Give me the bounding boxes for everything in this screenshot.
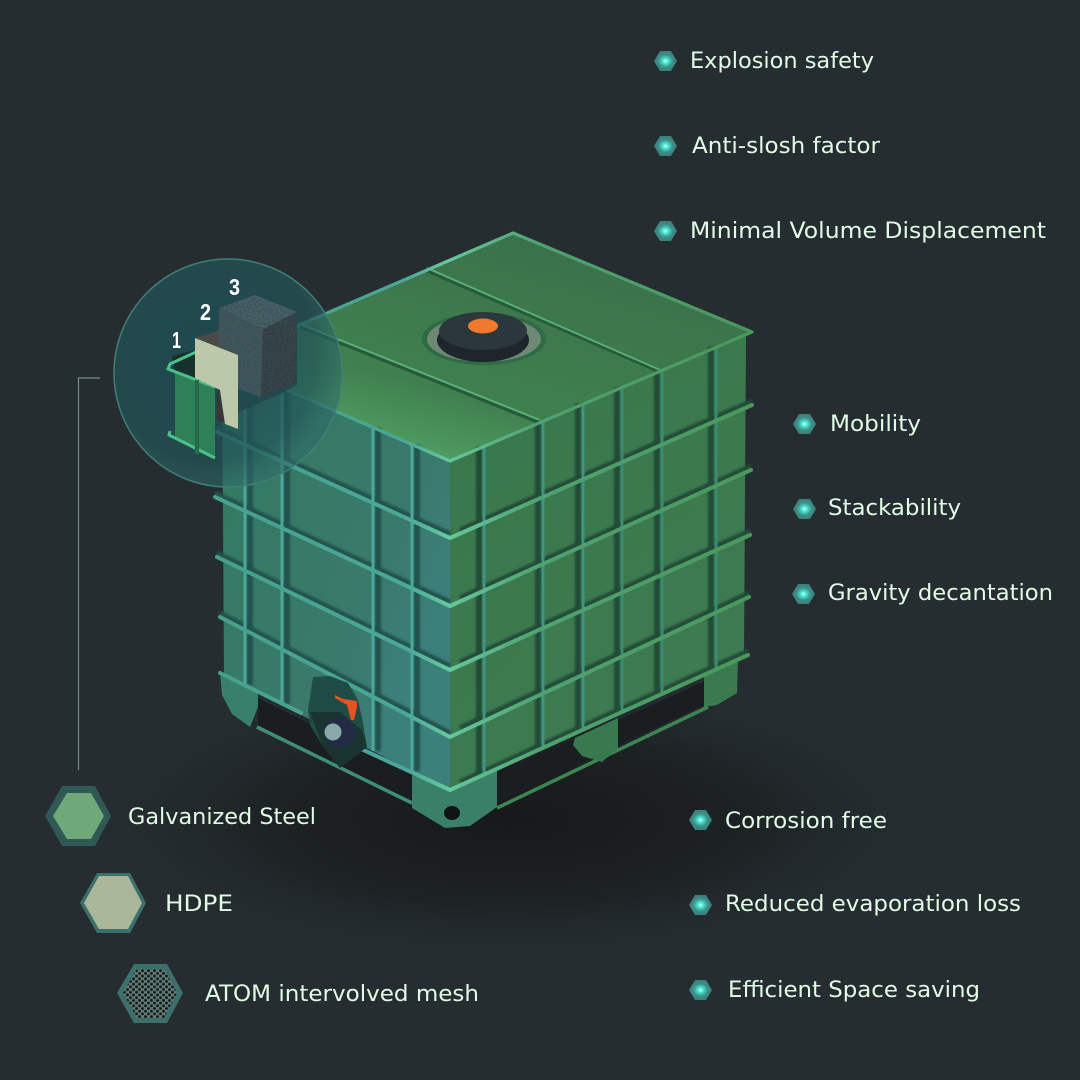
feature: Efficient Space saving: Efficient Space saving (728, 978, 980, 1003)
feature: Minimal Volume Displacement: Minimal Volume Displacement (690, 219, 1046, 244)
legend: galvanized steel (45, 786, 316, 846)
feature: Gravity decantation: Gravity decantation (828, 581, 1053, 606)
legend: ATOM mesh: ATOM intervolved mesh (205, 982, 479, 1007)
steel layer section (168, 350, 215, 458)
feature: Mobility: Mobility (830, 412, 921, 437)
layer number 1: 1 (172, 327, 181, 353)
pallet base (220, 660, 738, 828)
drain valve (308, 676, 367, 768)
layer number 3: 3 (229, 274, 240, 300)
cage rail shadows (215, 401, 752, 782)
legend: ATOM mesh (117, 964, 479, 1023)
top seams (300, 268, 660, 423)
feature: Stackability: Stackability (828, 496, 961, 521)
feature: Reduced evaporation loss: Reduced evaporation loss (725, 892, 1021, 917)
feature: Mobility (793, 412, 921, 437)
floor shadow (70, 670, 950, 970)
cage horizontal rails (215, 233, 752, 790)
feature: Explosion safety: Explosion safety (690, 49, 874, 74)
cutaway corner mask (196, 300, 297, 425)
tank left face (222, 362, 450, 790)
cage vertical bars (245, 347, 716, 775)
legend: HDPE (80, 873, 233, 933)
HDPE layer section (195, 330, 238, 429)
IBC tank (215, 233, 752, 828)
filler cap (422, 312, 546, 365)
layer number 2: 2 (200, 299, 211, 325)
tank top face (218, 233, 752, 461)
material detail bubble (114, 259, 342, 487)
cage vertical bar shadows (250, 347, 711, 775)
feature: Anti-slosh factor: Anti-slosh factor (692, 134, 881, 159)
mesh layer cube (219, 295, 297, 397)
legend: HDPE: HDPE (165, 892, 233, 917)
bubble circle (114, 259, 342, 487)
leader line (78, 378, 100, 770)
tank right face (450, 335, 746, 790)
legend: galvanized steel: Galvanized Steel (128, 805, 316, 830)
feature: Corrosion free: Corrosion free (725, 809, 887, 834)
